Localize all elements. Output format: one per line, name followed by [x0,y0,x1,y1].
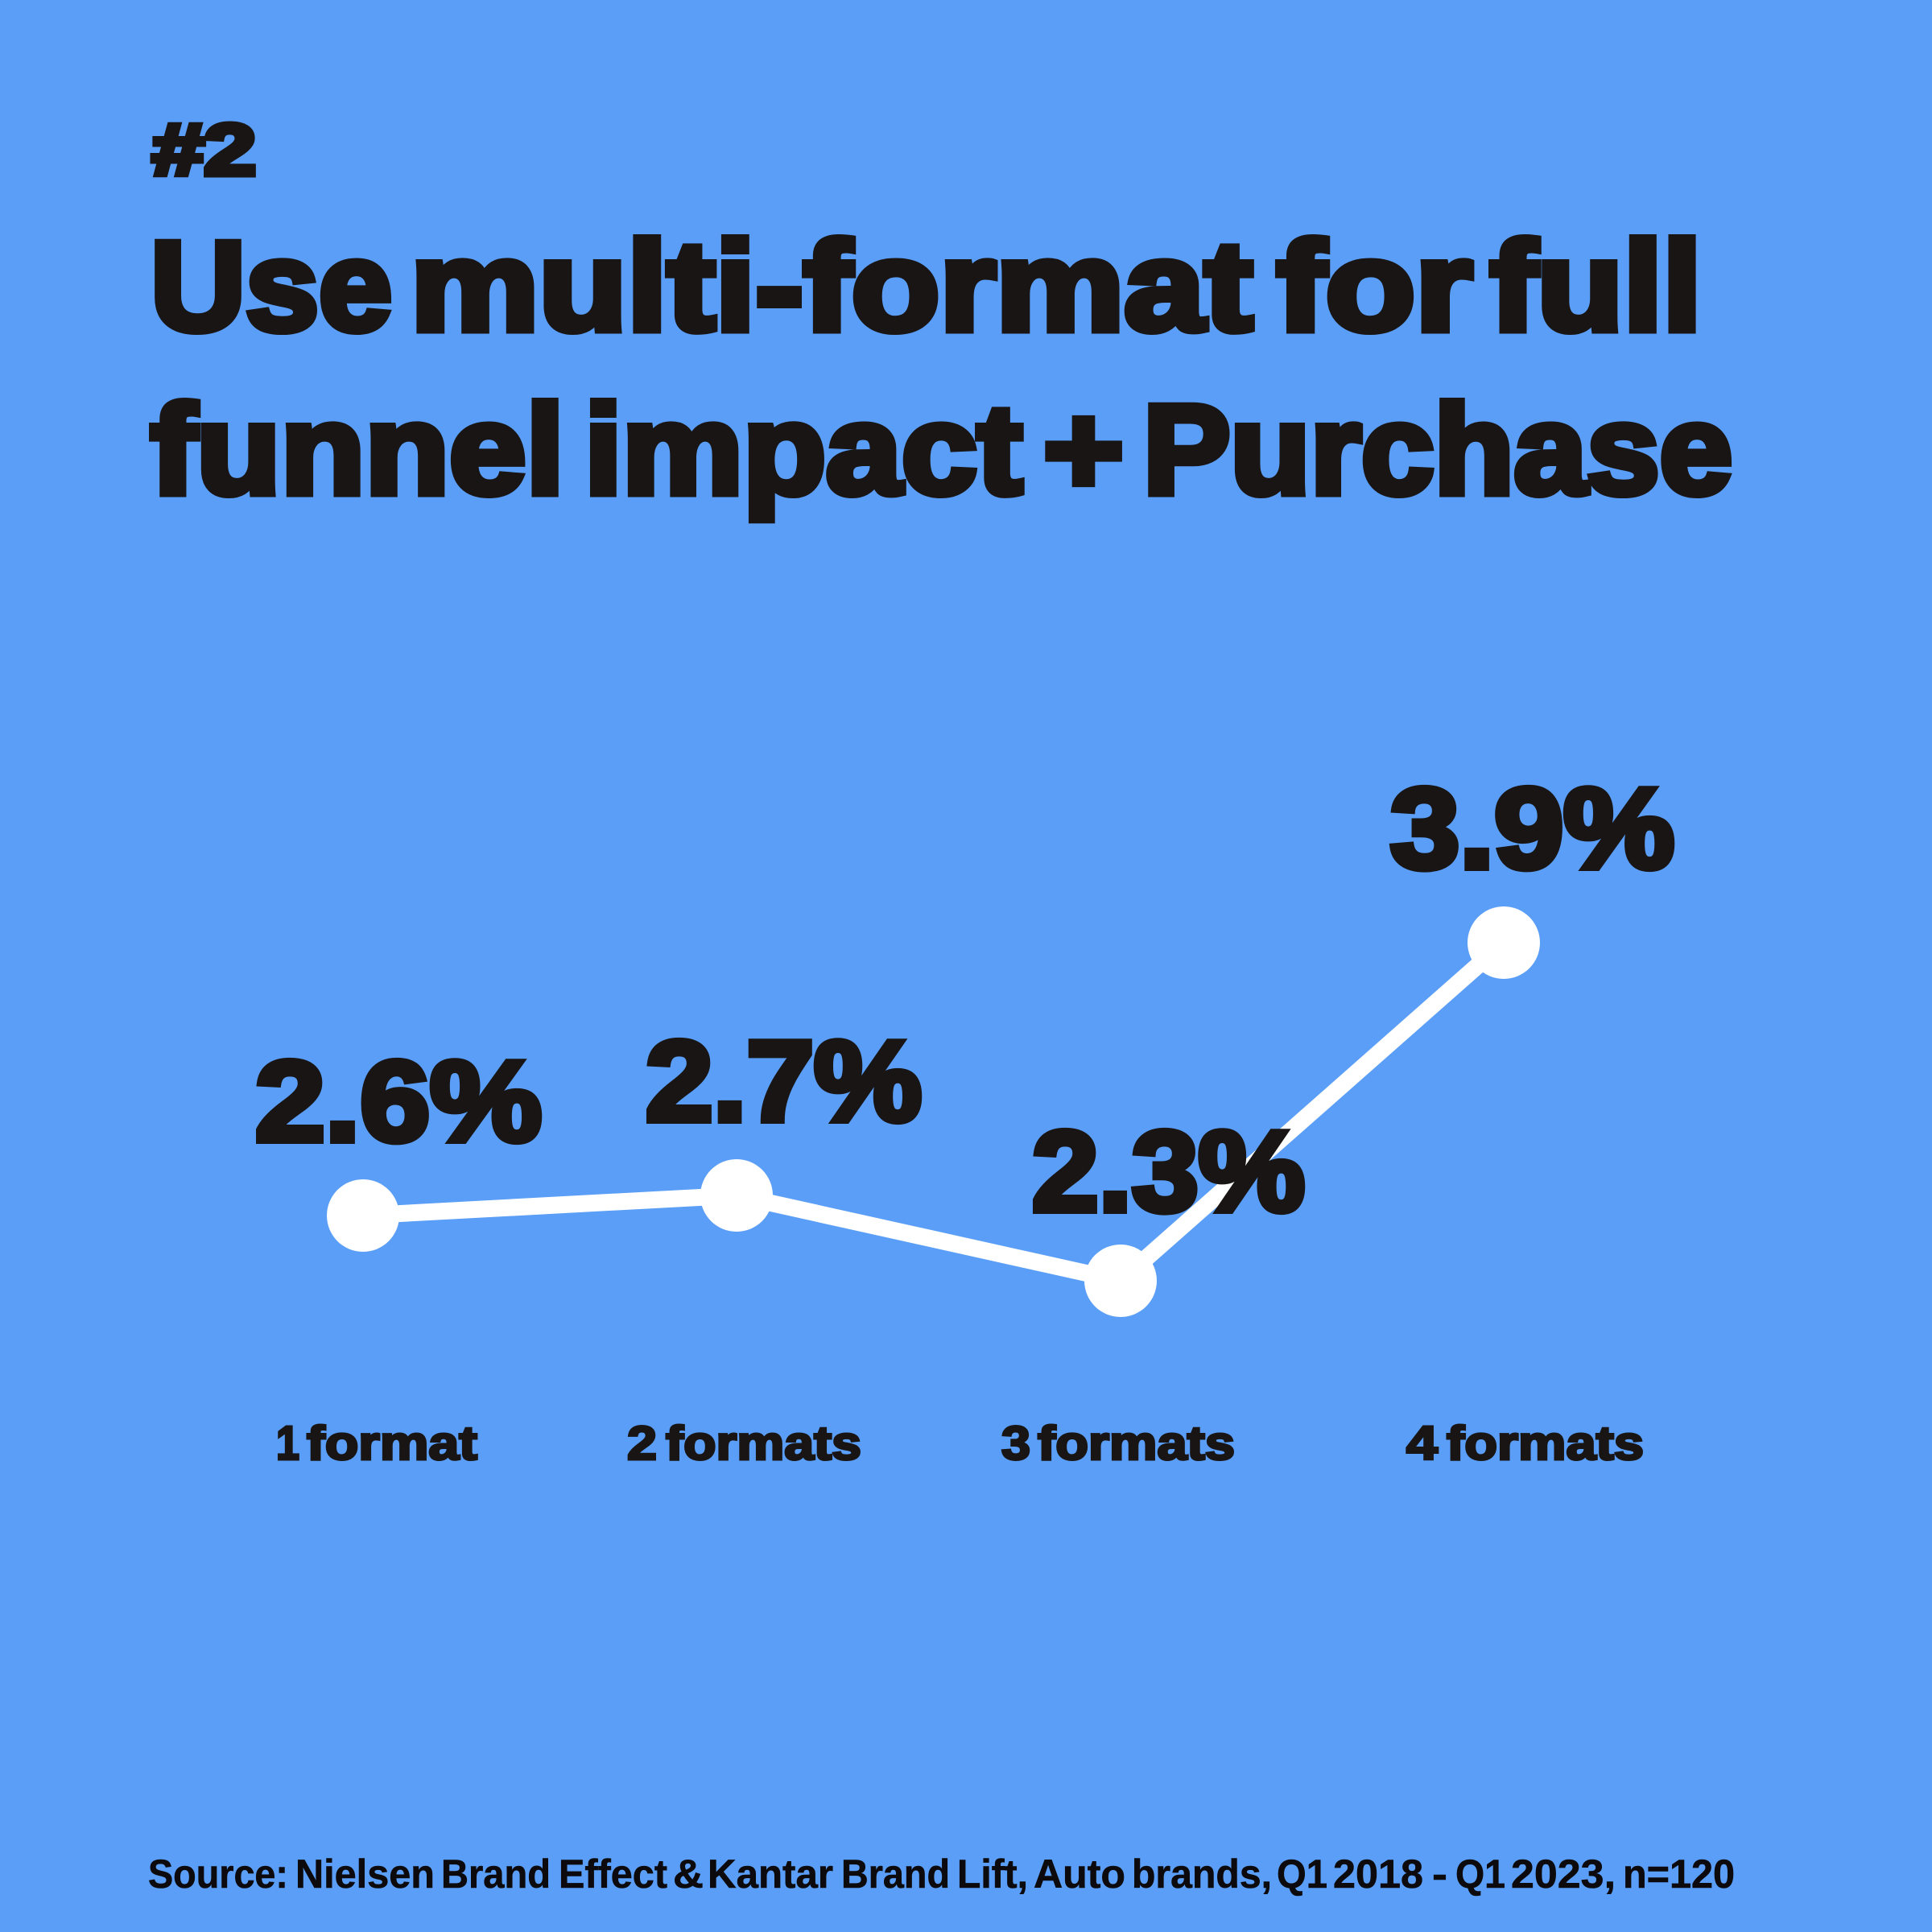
title: funnel [151,379,564,521]
axis label: 2 formats: formats [666,1417,861,1470]
source note: Q1 [1455,1852,1505,1897]
source note: Nielsen [295,1852,435,1897]
title: impact [584,379,1022,521]
value: 1 format: 2.6% [255,1038,542,1166]
source note: Source: [148,1852,288,1897]
title [151,216,1732,521]
source note: Q1 [1277,1852,1327,1897]
source note: & [673,1852,704,1897]
source note: Brand [841,1852,950,1897]
title: for [1277,216,1472,357]
title: + [1043,379,1124,521]
line chart [255,765,1674,1470]
source note [148,1852,1735,1897]
trend line [362,943,1504,1281]
source note: 2023, [1511,1852,1616,1897]
source note: brands, [1132,1852,1272,1897]
axis label: 3 formats: 3 [1001,1417,1030,1470]
title: Purchase [1143,379,1732,521]
source note: 2018 [1333,1852,1423,1897]
axis label: 4 formats: 4 [1406,1417,1438,1470]
source note: Lift, [957,1852,1028,1897]
value: 2 formats: 2.7% [646,1018,922,1146]
axis label: 3 formats: formats [1038,1417,1235,1470]
data points [327,906,1540,1317]
axis label: 2 formats: 2 [627,1417,657,1470]
value: 4 formats: 3.9% [1390,765,1674,893]
section number: #2 [152,110,256,191]
title: multi-format [411,216,1253,357]
title: full [1490,216,1702,357]
source note: Effect [559,1852,667,1897]
source note: Auto [1034,1852,1125,1897]
value: 3 formats: 2.3% [1032,1108,1305,1236]
axis label: 4 formats: formats [1447,1417,1644,1470]
axis label: 1 format: format [307,1417,477,1470]
source note: - [1432,1852,1447,1897]
axis label: 1 format: 1 [276,1417,299,1470]
title: Use [151,216,392,357]
source note: Kantar [708,1852,833,1897]
source note: Brand [441,1852,551,1897]
source note: n=120 [1623,1852,1735,1897]
